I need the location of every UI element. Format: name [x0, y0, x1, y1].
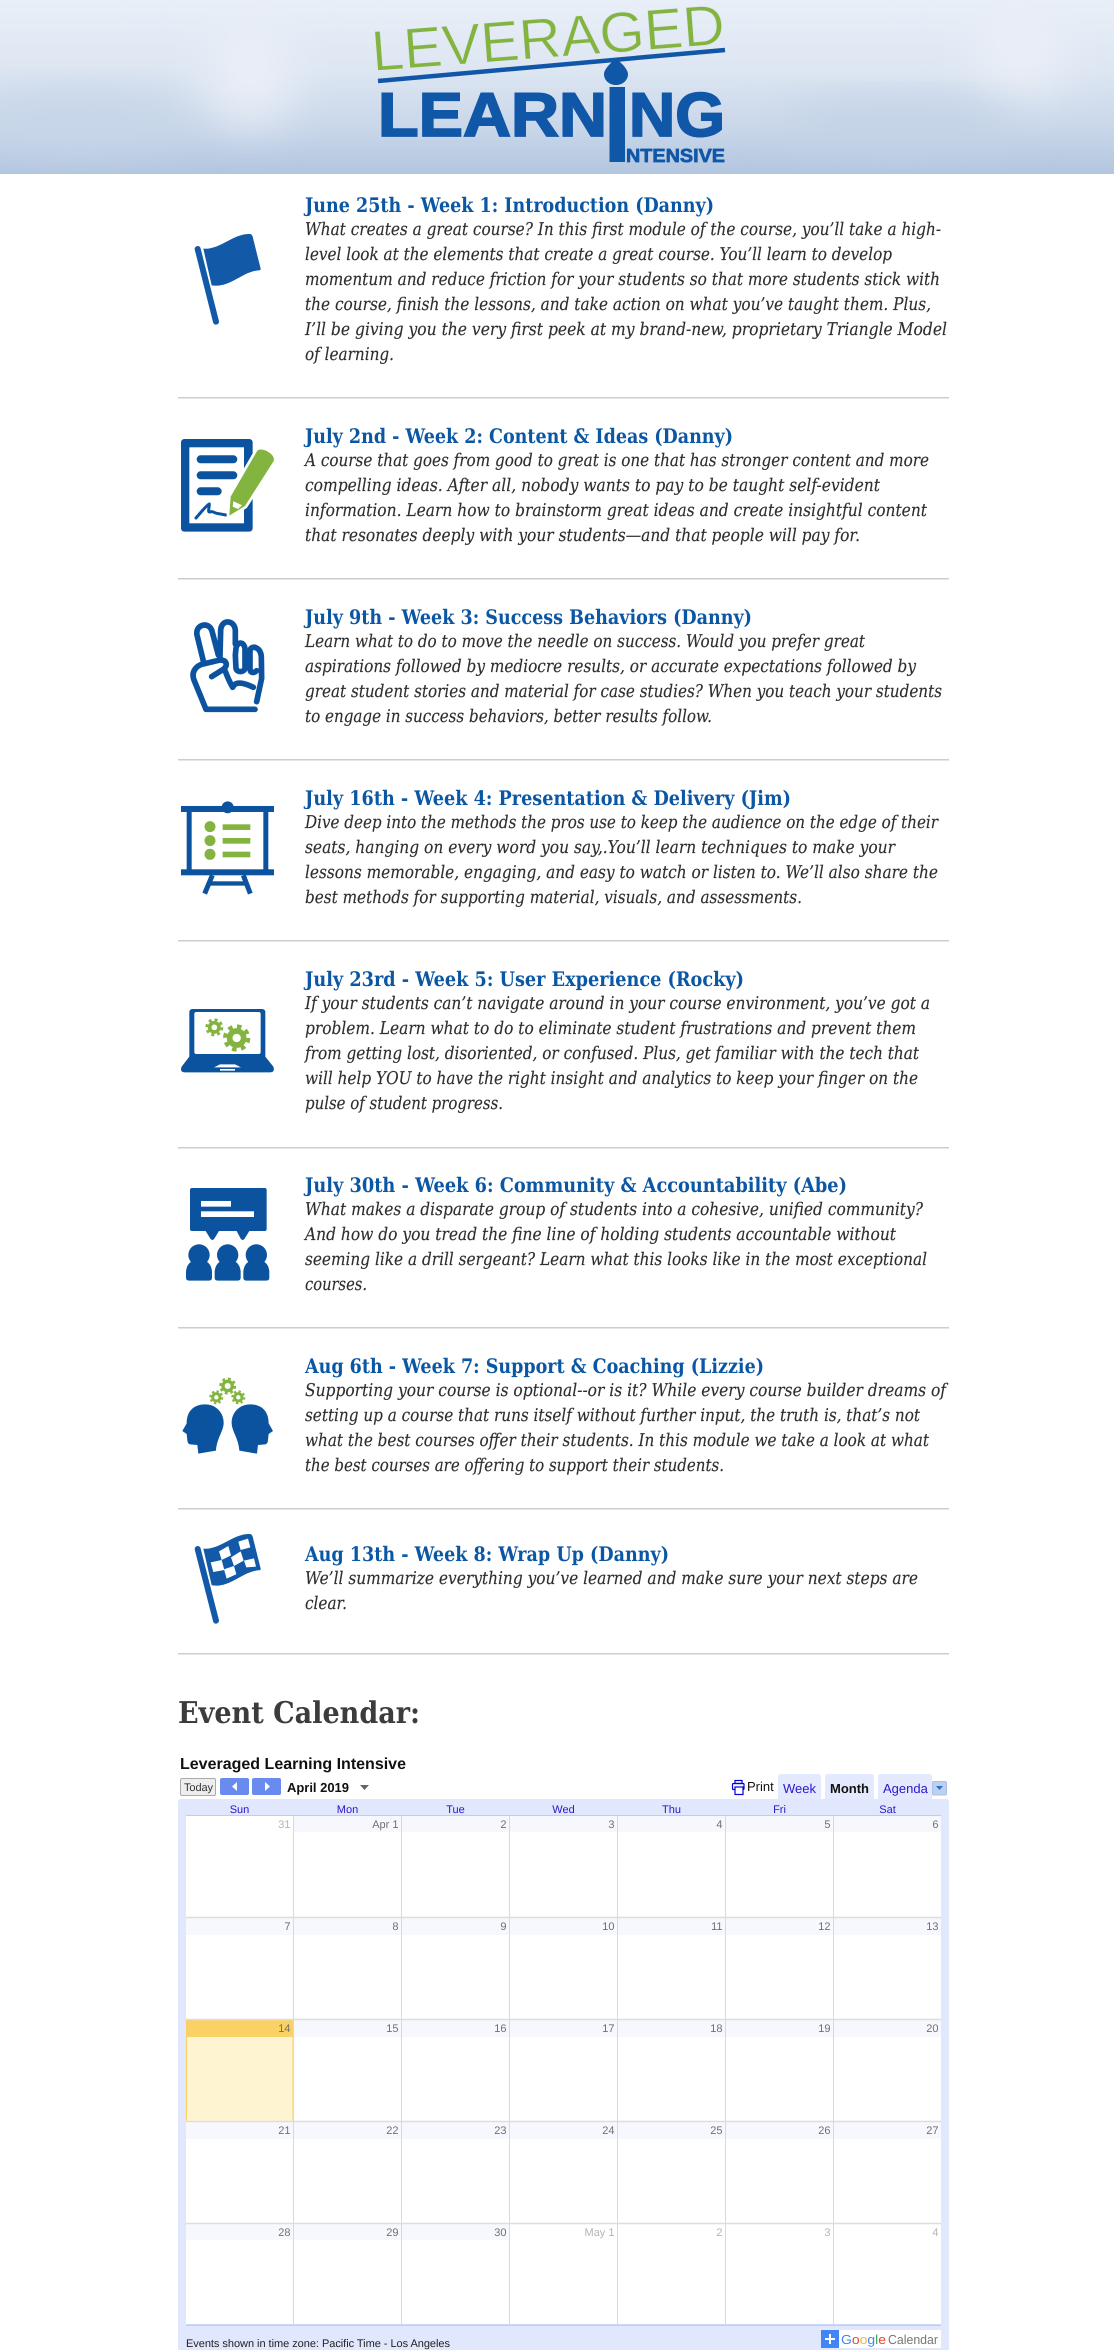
tab: month: [825, 1774, 874, 1799]
week 4 description: best methods for supporting material, visuals, and assessments.: [305, 888, 802, 908]
header banner: [0, 0, 1114, 174]
week 3 description: to engage in success behaviors, better results follow.: [305, 707, 712, 727]
week 1 description: level look at the elements that create a great course. You’ll learn to develop: [305, 245, 892, 265]
week 7 description: setting up a course that runs itself without further input, the truth is, that’s not: [305, 1406, 921, 1426]
week 5 description: will help YOU to have the right insight and analytics to keep your finger on the: [305, 1069, 918, 1089]
week 5 description: If your students can’t navigate around in your course environment, you’ve got a: [304, 994, 930, 1014]
week 1 description: [304, 220, 947, 365]
date numbers: 28: [278, 2227, 290, 2239]
date numbers: 3: [824, 2227, 830, 2239]
date numbers: 6: [932, 1819, 938, 1831]
icon: victory hand: [193, 622, 262, 709]
icon: presentation easel: [181, 801, 274, 894]
week 1 description: the course, finish the lessons, and take action on what you’ve taught them. Plus,: [305, 295, 931, 315]
date numbers: 12: [818, 1921, 830, 1933]
today button: Today: [184, 1782, 214, 1794]
current month: April 2019: [287, 1780, 349, 1795]
week 7 description: what the best courses offer their students. In this module we take a look at what: [305, 1431, 930, 1451]
print link: Print: [747, 1779, 774, 1794]
date numbers: 18: [710, 2023, 722, 2035]
next button: [252, 1778, 281, 1795]
icon: two heads with gears: [182, 1379, 273, 1454]
icon: document and pencil: [181, 439, 274, 532]
date numbers: 4: [932, 2227, 938, 2239]
logo word: LEARNING: NG: [629, 81, 725, 150]
date numbers: [278, 1819, 938, 2239]
week 6 title: July 30th - Week 6: Community & Accountability (Abe): [303, 1173, 847, 1197]
week 7 module: [182, 1354, 949, 1476]
date numbers: 10: [602, 1921, 614, 1933]
week 1 module: [198, 193, 947, 365]
calendar toolbar left: [180, 1778, 369, 1796]
week 5 description: pulse of student progress.: [305, 1094, 503, 1114]
logo beam: [378, 50, 725, 81]
day label strips: [186, 1816, 941, 2240]
week 7 title: Aug 6th - Week 7: Support & Coaching (Lizzie): [304, 1354, 764, 1378]
logo word: INTENSIVE: NTENSIVE: [626, 146, 725, 167]
calendar panel: [178, 1799, 949, 2350]
week 5 description: from getting lost, disoriented, or confused. Plus, get familiar with the tech that: [303, 1044, 920, 1064]
month dropdown arrow: [360, 1785, 369, 1790]
week 7 description: the best courses are offering to support their students.: [305, 1456, 724, 1476]
week 3 module: [193, 605, 942, 727]
week 3 description: Learn what to do to move the needle on success. Would you prefer great: [304, 632, 866, 652]
view menu button: [932, 1782, 946, 1795]
week 1 description: of learning.: [305, 345, 394, 365]
date numbers: 11: [711, 1921, 722, 1933]
date numbers: 25: [710, 2125, 722, 2137]
icon: flag: [198, 234, 261, 322]
week 6 description: What makes a disparate group of students into a cohesive, unified community?: [305, 1200, 924, 1220]
date numbers: 23: [494, 2125, 506, 2137]
week 6 description: seeming like a drill sergeant? Learn what this looks like in the most exceptional: [305, 1250, 927, 1270]
week 8 title: Aug 13th - Week 8: Wrap Up (Danny): [304, 1542, 669, 1566]
week 6 description: And how do you tread the fine line of holding students accountable without: [303, 1225, 897, 1245]
date numbers: 24: [602, 2125, 614, 2137]
date numbers: 15: [386, 2023, 398, 2035]
logo pivot: [604, 59, 628, 162]
week 7 description: [305, 1381, 949, 1476]
week 8 module: [198, 1534, 918, 1621]
weekday headers: Sat: [879, 1804, 896, 1816]
date numbers: 29: [386, 2227, 398, 2239]
date numbers: 26: [818, 2125, 830, 2137]
week 2 description: that resonates deeply with your students—and that people will pay for.: [305, 526, 860, 546]
date numbers: 2: [716, 2227, 722, 2239]
weekday headers: Tue: [446, 1804, 465, 1816]
week 2 description: A course that goes from good to great is one that has stronger content and more: [303, 451, 929, 471]
google calendar badge: Google: [841, 2332, 886, 2347]
sky background: [0, 0, 1114, 174]
week 3 description: [304, 632, 942, 727]
week 6 module: [186, 1173, 927, 1295]
week 6 description: courses.: [305, 1275, 367, 1295]
tab: agenda: Agenda: [883, 1781, 929, 1796]
tab: month: Month: [830, 1781, 869, 1796]
heading: event calendar: Event Calendar:: [178, 1696, 420, 1731]
week 2 description: compelling ideas. After all, nobody wants to pay to be taught self-evident: [305, 476, 881, 496]
calendar widget: [178, 1756, 949, 2350]
date numbers: 20: [926, 2023, 938, 2035]
date numbers: 22: [386, 2125, 398, 2137]
month grid: [186, 1815, 941, 2326]
week 7 description: Supporting your course is optional--or is it? While every course builder dreams of: [305, 1381, 949, 1401]
previous button: [220, 1778, 249, 1795]
week 4 title: July 16th - Week 4: Presentation & Delivery (Jim): [303, 786, 791, 810]
date numbers: Apr 1: [372, 1819, 398, 1831]
week 3 description: great student stories and material for case studies? When you teach your students: [305, 682, 942, 702]
week 1 description: What creates a great course? In this first module of the course, you’ll take a high-: [305, 220, 941, 240]
week 2 module: [181, 424, 929, 546]
weekday headers: Sun: [230, 1804, 249, 1816]
week 2 description: [303, 451, 929, 546]
calendar title: Leveraged Learning Intensive: [180, 1756, 406, 1773]
weekday headers: Fri: [773, 1804, 786, 1816]
date numbers: 30: [494, 2227, 506, 2239]
week 4 description: lessons memorable, engaging, and easy to watch or listen to. We’ll also share the: [305, 863, 938, 883]
week 4 description: Dive deep into the methods the pros use to keep the audience on the edge of their: [304, 813, 939, 833]
date numbers: 8: [392, 1921, 398, 1933]
today cell: [186, 2020, 293, 2122]
logo: [369, 0, 727, 167]
date numbers: 5: [824, 1819, 830, 1831]
week 8 description: clear.: [305, 1594, 347, 1614]
date numbers: 14: [278, 2023, 290, 2035]
icon: checkered flag: [198, 1534, 261, 1621]
date numbers: 31: [278, 1819, 290, 1831]
date numbers: 21: [278, 2125, 290, 2137]
weekday headers: Wed: [552, 1804, 575, 1816]
date numbers: 9: [500, 1921, 506, 1933]
weekday headers: Mon: [337, 1804, 358, 1816]
date numbers: 3: [608, 1819, 614, 1831]
weekday headers: [230, 1804, 896, 1816]
week 5 title: July 23rd - Week 5: User Experience (Rocky): [303, 967, 744, 991]
icon: speech bubble and people: [186, 1188, 269, 1281]
week 5 module: [181, 967, 930, 1114]
tab: week: Week: [783, 1781, 816, 1796]
week 6 description: [303, 1200, 927, 1295]
week 1 description: I’ll be giving you the very first peek at my brand-new, proprietary Triangle Model: [304, 320, 947, 340]
weekday headers: Thu: [662, 1804, 681, 1816]
week 5 description: problem. Learn what to do to eliminate student frustrations and prevent them: [305, 1019, 916, 1039]
google calendar badge: [821, 2330, 941, 2348]
tab: agenda: [878, 1774, 932, 1799]
date numbers: 17: [602, 2023, 614, 2035]
today button: [180, 1778, 216, 1796]
week 1 title: June 25th - Week 1: Introduction (Danny): [303, 193, 714, 217]
week 4 description: [304, 813, 939, 908]
tab: week: [778, 1774, 821, 1799]
week 4 description: seats, hanging on every word you say,.You’ll learn techniques to make your: [305, 838, 896, 858]
logo word: LEARNING: [378, 81, 725, 150]
google calendar badge: Calendar: [888, 2332, 939, 2347]
icon: laptop with gears: [181, 1009, 274, 1072]
date numbers: 16: [494, 2023, 506, 2035]
week 4 module: [181, 786, 939, 908]
week 2 title: July 2nd - Week 2: Content & Ideas (Danny): [303, 424, 733, 448]
week 3 description: aspirations followed by mediocre results, or accurate expectations followed by: [305, 657, 917, 677]
date numbers: 19: [818, 2023, 830, 2035]
date numbers: 2: [500, 1819, 506, 1831]
week 2 description: information. Learn how to brainstorm great ideas and create insightful content: [305, 501, 928, 521]
icon: printer: [732, 1780, 744, 1794]
date numbers: 7: [284, 1921, 290, 1933]
date numbers: 13: [926, 1921, 938, 1933]
week 3 title: July 9th - Week 3: Success Behaviors (Danny): [303, 605, 752, 629]
week 5 description: [303, 994, 930, 1114]
week 8 description: We’ll summarize everything you’ve learned and make sure your next steps are: [305, 1569, 918, 1589]
time zone note: Events shown in time zone: Pacific Time - Los Angeles: [186, 2338, 450, 2350]
date numbers: 4: [716, 1819, 722, 1831]
week 1 description: momentum and reduce friction for your students so that more students stick with: [305, 270, 940, 290]
date numbers: May 1: [585, 2227, 614, 2239]
calendar toolbar right: [732, 1774, 946, 1799]
week 8 description: [305, 1569, 918, 1614]
logo word: LEARNING: LEARN: [378, 81, 607, 150]
date numbers: 27: [926, 2125, 938, 2137]
